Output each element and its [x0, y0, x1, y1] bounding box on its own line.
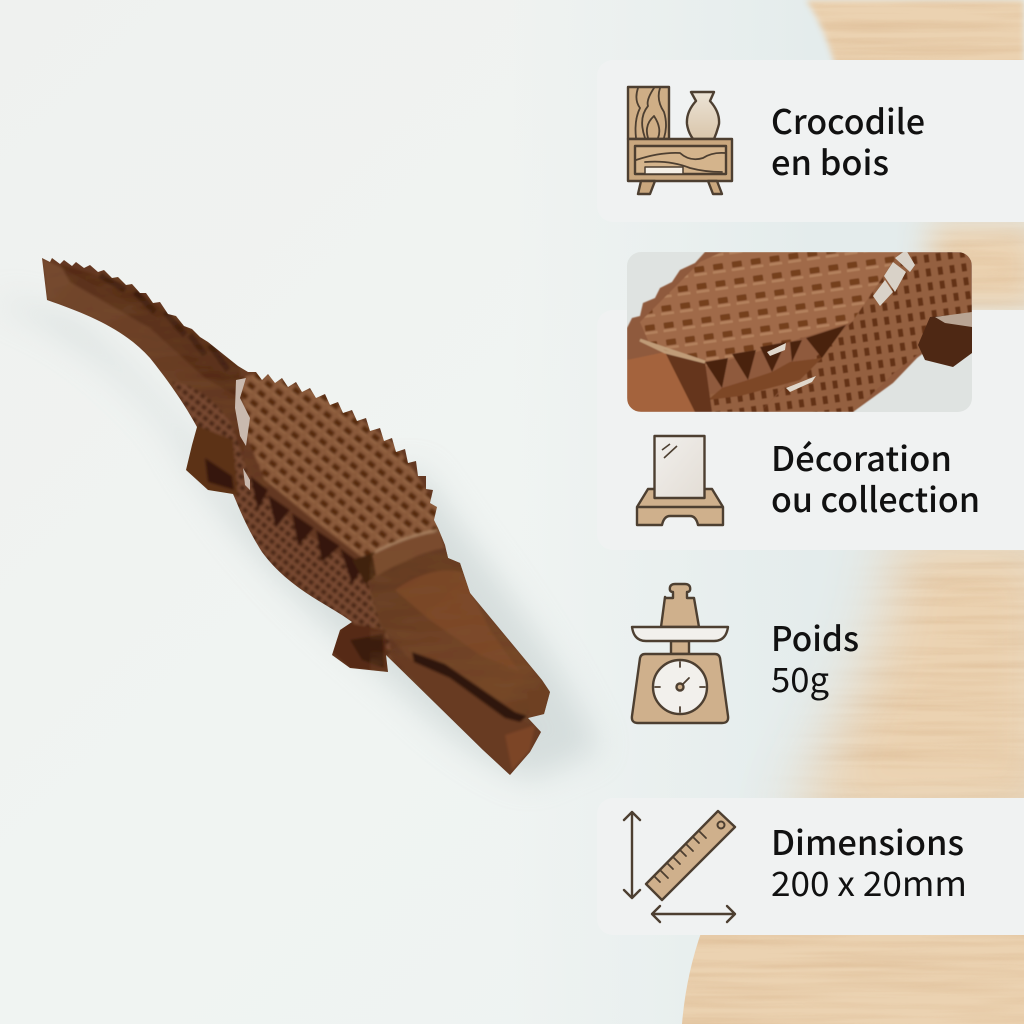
label: Crocodile en bois: Crocodile [771, 95, 925, 144]
label: Dimensions: Dimensions [771, 816, 964, 865]
side triangles [250, 476, 364, 584]
label: Crocodile en bois [771, 95, 925, 185]
bottom scales strip [714, 388, 778, 412]
label: Dimensions: 200 x 20mm [771, 857, 967, 906]
crocodile wooden figure [30, 250, 560, 780]
weight section [632, 584, 859, 723]
label: Dimensions [771, 816, 967, 906]
label: Poids 50g [771, 612, 859, 702]
panel: product name [597, 60, 1024, 222]
label: Décoration ou collection [771, 432, 980, 522]
label: Crocodile en bois: en bois [771, 136, 889, 185]
foot [918, 313, 972, 367]
rear leg [185, 425, 238, 496]
back armour [240, 372, 442, 565]
side body scales [172, 382, 392, 660]
panel: dimensions [597, 798, 1024, 935]
panel: usage [597, 310, 1024, 550]
head [368, 552, 550, 716]
tail [42, 260, 244, 396]
icon: display stand with glass [637, 436, 723, 525]
icon: kitchen scale [632, 584, 728, 723]
lower jaw [385, 650, 541, 775]
label: Décoration ou collection: Décoration [771, 432, 952, 481]
icon: wooden furniture with vase [628, 87, 732, 194]
crocodile shadow [0, 300, 600, 780]
label: Poids 50g: 50g [771, 653, 829, 702]
white wear marks [873, 250, 915, 306]
icon: ruler with dimension arrows [624, 811, 735, 922]
white wear marks [235, 378, 250, 446]
wood surface [682, 0, 1024, 1024]
label: Décoration ou collection: ou collection [771, 473, 980, 522]
neck band [371, 532, 446, 576]
close-up photo of crocodile back [627, 250, 972, 412]
orange end grain [627, 352, 695, 412]
front leg [333, 624, 387, 671]
dark triangular ridges [705, 325, 846, 388]
label: Poids 50g: Poids [771, 612, 859, 661]
